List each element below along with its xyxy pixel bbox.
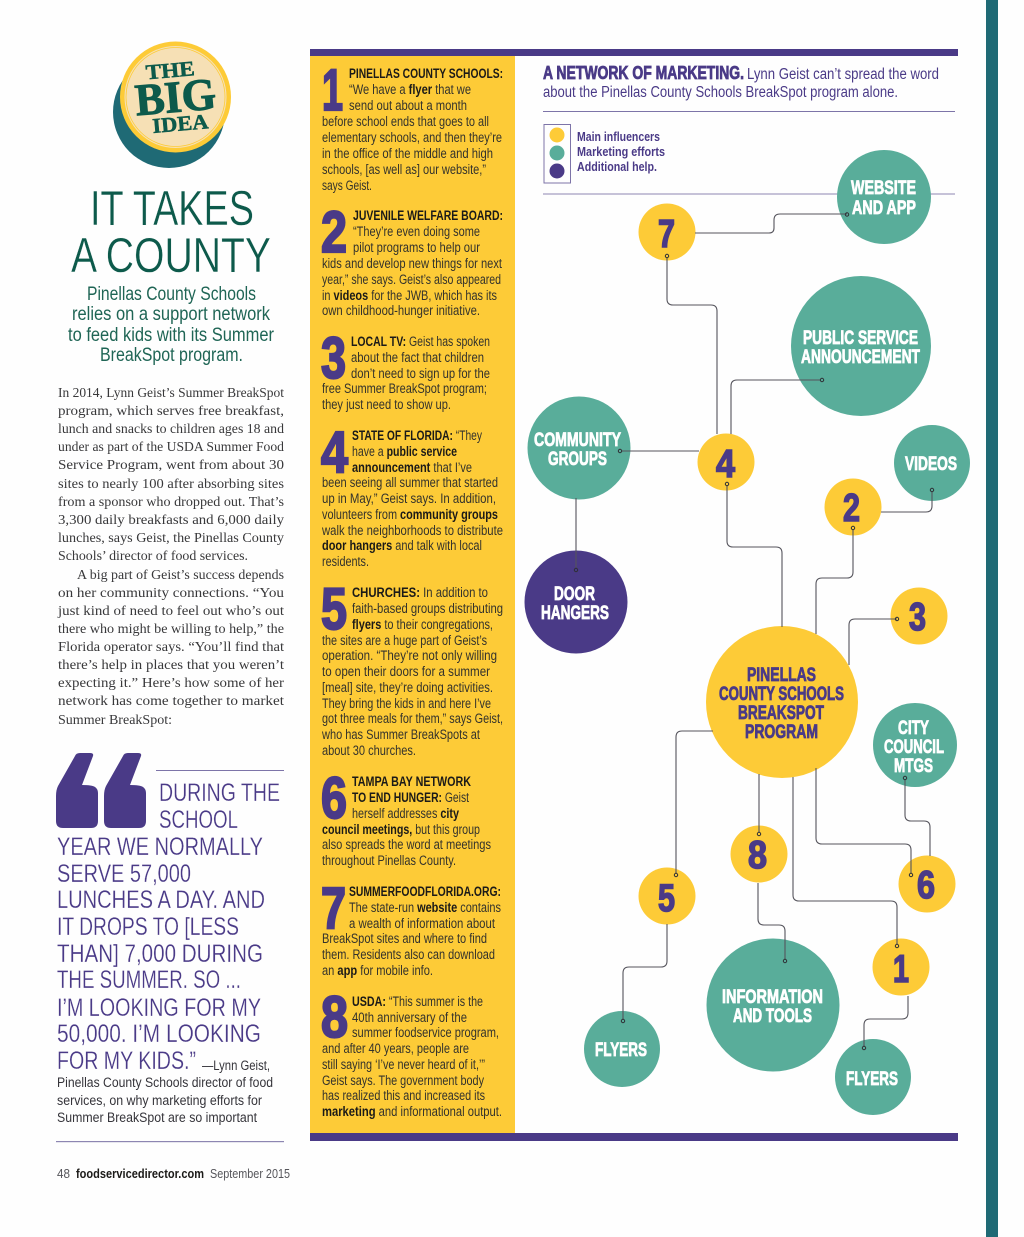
item 4: State of Florida: been seeing all summer that started xyxy=(322,475,498,490)
legend: Marketing efforts xyxy=(577,145,665,159)
body article text xyxy=(57,386,284,728)
body article text: program, which serves free breakfast, xyxy=(58,404,284,419)
item 7: SummerFoodFlorida.org: BreakSpot sites and where to find xyxy=(322,931,487,946)
item 3: Local TV: LOCAL TV: Geist has spoken xyxy=(351,334,490,349)
node: number 2: 2 xyxy=(843,487,860,530)
item 4: State of Florida: walk the neighborhoods to distribute xyxy=(321,523,503,538)
body article text: on her community connections. “You xyxy=(58,586,284,601)
body article text: Summer BreakSpot: xyxy=(58,713,172,728)
legend: Main influencers xyxy=(577,130,660,144)
body article text: lunches, says Geist, the Pinellas County xyxy=(58,531,284,546)
body article text: lunch and snacks to children ages 18 and xyxy=(58,422,284,437)
node: door hangers: HANGERS xyxy=(541,602,609,624)
item 3: Local TV: about the fact that children xyxy=(351,350,484,365)
body article text: under as part of the USDA Summer Food xyxy=(58,440,284,455)
item 5: Churches: to open their doors for a summer xyxy=(322,664,490,679)
item 4: State of Florida: volunteers from community groups xyxy=(322,507,498,522)
quote attribution: Summer BreakSpot are so important xyxy=(57,1110,257,1125)
pull quote: LUNCHES A DAY. AND xyxy=(57,886,265,914)
item 8: USDA: 8 xyxy=(321,985,348,1050)
item 4: State of Florida: STATE OF FLORIDA: “They xyxy=(352,428,482,443)
item 3: Local TV: 3 xyxy=(321,326,346,391)
icon: quotation marks xyxy=(56,753,146,828)
body article text: In 2014, Lynn Geist’s Summer BreakSpot xyxy=(58,386,284,401)
node: city council meetings: CITY xyxy=(898,717,929,739)
item 6: Tampa Bay Network: throughout Pinellas County. xyxy=(322,853,456,868)
item 5: Churches: about 30 churches. xyxy=(322,743,416,758)
item 6: Tampa Bay Network xyxy=(321,766,491,868)
item 5: Churches: who has Summer BreakSpots at xyxy=(321,727,480,742)
item 7: SummerFoodFlorida.org xyxy=(321,876,501,978)
quote attribution: —Lynn Geist, xyxy=(202,1058,270,1073)
node: website and app xyxy=(837,150,931,244)
body article text: expecting it.” Here’s how some of her xyxy=(58,676,284,691)
subtitle xyxy=(68,284,275,366)
logo: the big idea: THE xyxy=(145,56,196,84)
item 4: State of Florida: 4 xyxy=(321,420,348,485)
node: website and app: AND APP xyxy=(852,197,916,219)
node: number 7: 7 xyxy=(658,213,675,256)
node: flyers left xyxy=(584,1011,660,1087)
item 8: USDA: summer foodservice program, xyxy=(352,1025,499,1040)
node: information and tools xyxy=(706,938,840,1072)
node: public service announcement xyxy=(791,276,931,416)
right edge bar xyxy=(986,0,998,1237)
node: door hangers xyxy=(524,550,628,654)
item 8: USDA: marketing and informational output. xyxy=(322,1104,502,1119)
node: Pinellas County Schools BreakSpot Program: COUNTY SCHOOLS xyxy=(719,683,844,705)
item 7: SummerFoodFlorida.org: them. Residents also can download xyxy=(322,947,495,962)
node: number 1: 1 xyxy=(893,948,909,991)
item 6: Tampa Bay Network: herself addresses city xyxy=(352,806,459,821)
pull quote: IT DROPS TO [LESS xyxy=(57,913,239,941)
item 7: SummerFoodFlorida.org: SUMMERFOODFLORIDA.ORG: xyxy=(349,884,501,899)
item 2: Juvenile Welfare Board: year,” she says. Geist’s also appeared xyxy=(322,272,501,287)
node: number 2 xyxy=(824,478,882,536)
item 3: Local TV: they just need to show up. xyxy=(322,397,451,412)
node: number 8 xyxy=(730,826,788,882)
item 3: Local TV: free Summer BreakSpot program; xyxy=(322,381,487,396)
item 6: Tampa Bay Network: council meetings, but this group xyxy=(322,822,480,837)
item 4: State of Florida: announcement that I’ve xyxy=(352,460,472,475)
yellow column background xyxy=(310,56,515,1134)
network heading: A NETWORK OF MARKETING. xyxy=(543,63,744,83)
pull quote xyxy=(56,753,280,1075)
node: number 6 xyxy=(898,856,956,912)
node: Pinellas County Schools BreakSpot Program: PROGRAM xyxy=(745,721,818,743)
item 4: State of Florida xyxy=(321,420,503,569)
node: number 8: 8 xyxy=(748,834,767,877)
body article text: Service Program, went from about 30 xyxy=(58,458,284,473)
item 5: Churches xyxy=(321,577,503,758)
subtitle: to feed kids with its Summer xyxy=(68,325,275,346)
quote attribution xyxy=(57,1058,273,1125)
body article text: there’s help in places that you weren’t xyxy=(58,658,284,673)
item 4: State of Florida: have a public service xyxy=(352,444,457,459)
node: flyers left: FLYERS xyxy=(595,1039,647,1061)
item 1: Pinellas County Schools: before school ends that goes to all xyxy=(322,114,489,129)
subtitle: BreakSpot program. xyxy=(100,345,243,366)
item 8: USDA: still saying ‘I’ve never heard of it,’” xyxy=(322,1057,485,1072)
body article text: from a sponsor who dropped out. That’s xyxy=(58,495,284,510)
body article text: Schools’ director of food services. xyxy=(58,549,248,564)
footer xyxy=(57,1167,290,1181)
logo: the big idea: BIG xyxy=(133,69,218,125)
subtitle: Pinellas County Schools xyxy=(87,284,256,305)
node: public service announcement: ANNOUNCEMENT xyxy=(801,346,920,368)
node: number 5: 5 xyxy=(658,877,675,920)
connector lines xyxy=(576,214,932,1046)
node: flyers right xyxy=(835,1039,911,1115)
item 2: Juvenile Welfare Board: in videos for the JWB, which has its xyxy=(322,288,497,303)
node: videos xyxy=(894,425,970,501)
item 8: USDA xyxy=(321,985,502,1119)
node: website and app: WEBSITE xyxy=(851,177,916,199)
node: information and tools: AND TOOLS xyxy=(733,1005,812,1027)
item 6: Tampa Bay Network: also spreads the word at meetings xyxy=(322,837,491,852)
item 5: Churches: operation. “They’re not only willing xyxy=(322,648,497,663)
network heading: Lynn Geist can’t spread the word xyxy=(747,66,939,83)
network heading: about the Pinellas County Schools BreakSpot program alone. xyxy=(543,84,898,101)
item 5: Churches: They bring the kids in and here I’ve xyxy=(322,696,491,711)
node: number 3: 3 xyxy=(909,596,926,639)
logo: the big idea xyxy=(113,42,231,168)
item 1: Pinellas County Schools: elementary schools, and then they’re xyxy=(322,130,502,145)
node: videos: VIDEOS xyxy=(905,453,957,475)
pull quote: 50,000. I’M LOOKING xyxy=(57,1020,261,1048)
pull quote: FOR MY KIDS.” xyxy=(57,1047,196,1075)
item 8: USDA: has realized this and increased its xyxy=(322,1088,485,1103)
node: community groups: COMMUNITY xyxy=(534,429,621,451)
subtitle: relies on a support network xyxy=(72,304,270,325)
body article text: network has come together to market xyxy=(58,694,284,709)
item 3: Local TV: don’t need to sign up for the xyxy=(351,366,490,381)
node: number 6: 6 xyxy=(917,864,935,907)
pull quote: SCHOOL xyxy=(159,806,238,834)
node: city council meetings xyxy=(873,703,957,787)
item 6: Tampa Bay Network: TAMPA BAY NETWORK xyxy=(352,774,471,789)
node: number 4 xyxy=(698,434,754,490)
item 2: Juvenile Welfare Board xyxy=(321,200,503,318)
item 6: Tampa Bay Network: TO END HUNGER: Geist xyxy=(352,790,469,805)
title: IT TAKES xyxy=(90,182,254,236)
pull quote: DURING THE xyxy=(159,779,280,807)
node: community groups: GROUPS xyxy=(548,448,607,470)
connector end dots xyxy=(574,213,934,1050)
item 5: Churches: flyers to their congregations, xyxy=(352,617,493,632)
node: Pinellas County Schools BreakSpot Program: PINELLAS xyxy=(747,664,816,686)
item 5: Churches: 5 xyxy=(321,577,347,642)
node: city council meetings: MTGS xyxy=(894,755,933,777)
item 5: Churches: CHURCHES: In addition to xyxy=(352,585,488,600)
node: number 5 xyxy=(638,868,696,924)
item 2: Juvenile Welfare Board: kids and develop new things for next xyxy=(322,256,502,271)
item 5: Churches: [meal] site, they’re doing activities. xyxy=(322,680,493,695)
node: number 1 xyxy=(872,938,930,996)
item 8: USDA: and after 40 years, people are xyxy=(322,1041,469,1056)
item 1: Pinellas County Schools: 1 xyxy=(322,58,343,123)
top purple bar xyxy=(310,49,958,56)
title xyxy=(71,182,271,283)
title: A COUNTY xyxy=(71,229,271,283)
footer: September 2015 xyxy=(210,1167,290,1181)
pull quote: THE SUMMER. SO ... xyxy=(57,966,241,994)
item 7: SummerFoodFlorida.org: The state-run website contains xyxy=(349,900,501,915)
footer: foodservicedirector.com xyxy=(76,1167,204,1181)
item 8: USDA: Geist says. The government body xyxy=(322,1073,484,1088)
pull quote: YEAR WE NORMALLY xyxy=(57,833,263,861)
item 1: Pinellas County Schools: schools, [as well as] our website,” xyxy=(322,162,486,177)
item 7: SummerFoodFlorida.org: an app for mobile info. xyxy=(322,963,433,978)
item 5: Churches: the sites are a huge part of Geist’s xyxy=(322,633,487,648)
node: information and tools: INFORMATION xyxy=(722,986,823,1008)
node: number 7 xyxy=(638,204,696,260)
body article text: just kind of need to feel out who’s out xyxy=(57,604,284,619)
network heading xyxy=(543,63,939,101)
item 4: State of Florida: door hangers and talk with local xyxy=(322,538,482,553)
node: Pinellas County Schools BreakSpot Program xyxy=(706,626,858,778)
item 5: Churches: got three meals for them,” says Geist, xyxy=(322,711,503,726)
node: city council meetings: COUNCIL xyxy=(884,736,944,758)
item 8: USDA: USDA: “This summer is the xyxy=(352,994,483,1009)
item 4: State of Florida: up in May,” Geist says. In addition, xyxy=(322,491,496,506)
quote attribution: Pinellas County Schools director of food xyxy=(57,1075,273,1090)
body article text: 3,300 daily breakfasts and 6,000 daily xyxy=(58,513,284,528)
item 3: Local TV xyxy=(321,326,490,412)
item 2: Juvenile Welfare Board: JUVENILE WELFARE BOARD: xyxy=(353,208,503,223)
item 6: Tampa Bay Network: 6 xyxy=(321,766,347,831)
node: door hangers: DOOR xyxy=(554,583,595,605)
item 2: Juvenile Welfare Board: pilot programs to help our xyxy=(353,240,480,255)
pull quote: SERVE 57,000 xyxy=(57,860,191,888)
logo: the big idea: IDEA xyxy=(151,109,210,138)
legend xyxy=(544,124,665,183)
node: public service announcement: PUBLIC SERVICE xyxy=(803,327,918,349)
body article text: A big part of Geist’s success depends xyxy=(77,568,284,583)
item 8: USDA: 40th anniversary of the xyxy=(352,1010,467,1025)
bottom purple bar xyxy=(310,1133,958,1141)
item 1: Pinellas County Schools: says Geist. xyxy=(322,178,372,193)
pull quote: I’M LOOKING FOR MY xyxy=(57,994,261,1022)
item 7: SummerFoodFlorida.org: a wealth of information about xyxy=(349,916,495,931)
node: Pinellas County Schools BreakSpot Program: BREAKSPOT xyxy=(738,702,824,724)
node: number 3 xyxy=(890,588,948,644)
body article text: sites to nearly 100 after absorbing sites xyxy=(58,477,284,492)
body article text: there who might be willing to help,” the xyxy=(58,622,284,637)
body article text: Florida operator says. “You’ll find that xyxy=(58,640,284,655)
item 1: Pinellas County Schools: send out about a month xyxy=(349,98,467,113)
item 7: SummerFoodFlorida.org: 7 xyxy=(321,876,346,941)
node: community groups xyxy=(528,396,630,500)
item 2: Juvenile Welfare Board: 2 xyxy=(321,200,347,265)
item 1: Pinellas County Schools: PINELLAS COUNTY SCHOOLS: xyxy=(349,66,503,81)
item 1: Pinellas County Schools: “We have a flyer that we xyxy=(349,82,471,97)
quote attribution: services, on why marketing efforts for xyxy=(57,1093,262,1108)
node: number 4: 4 xyxy=(716,443,735,486)
item 4: State of Florida: residents. xyxy=(322,554,369,569)
node: flyers right: FLYERS xyxy=(846,1068,898,1090)
yellow column: numbered list xyxy=(321,58,503,1119)
pull quote: THAN] 7,000 DURING xyxy=(57,940,263,968)
item 1: Pinellas County Schools: in the office of the middle and high xyxy=(322,146,493,161)
legend: Additional help. xyxy=(577,160,657,174)
item 5: Churches: faith-based groups distributing xyxy=(352,601,503,616)
footer: 48 xyxy=(57,1167,70,1181)
item 1: Pinellas County Schools xyxy=(322,58,503,193)
item 2: Juvenile Welfare Board: “They’re even doing some xyxy=(353,224,480,239)
item 2: Juvenile Welfare Board: own childhood-hunger initiative. xyxy=(322,303,480,318)
